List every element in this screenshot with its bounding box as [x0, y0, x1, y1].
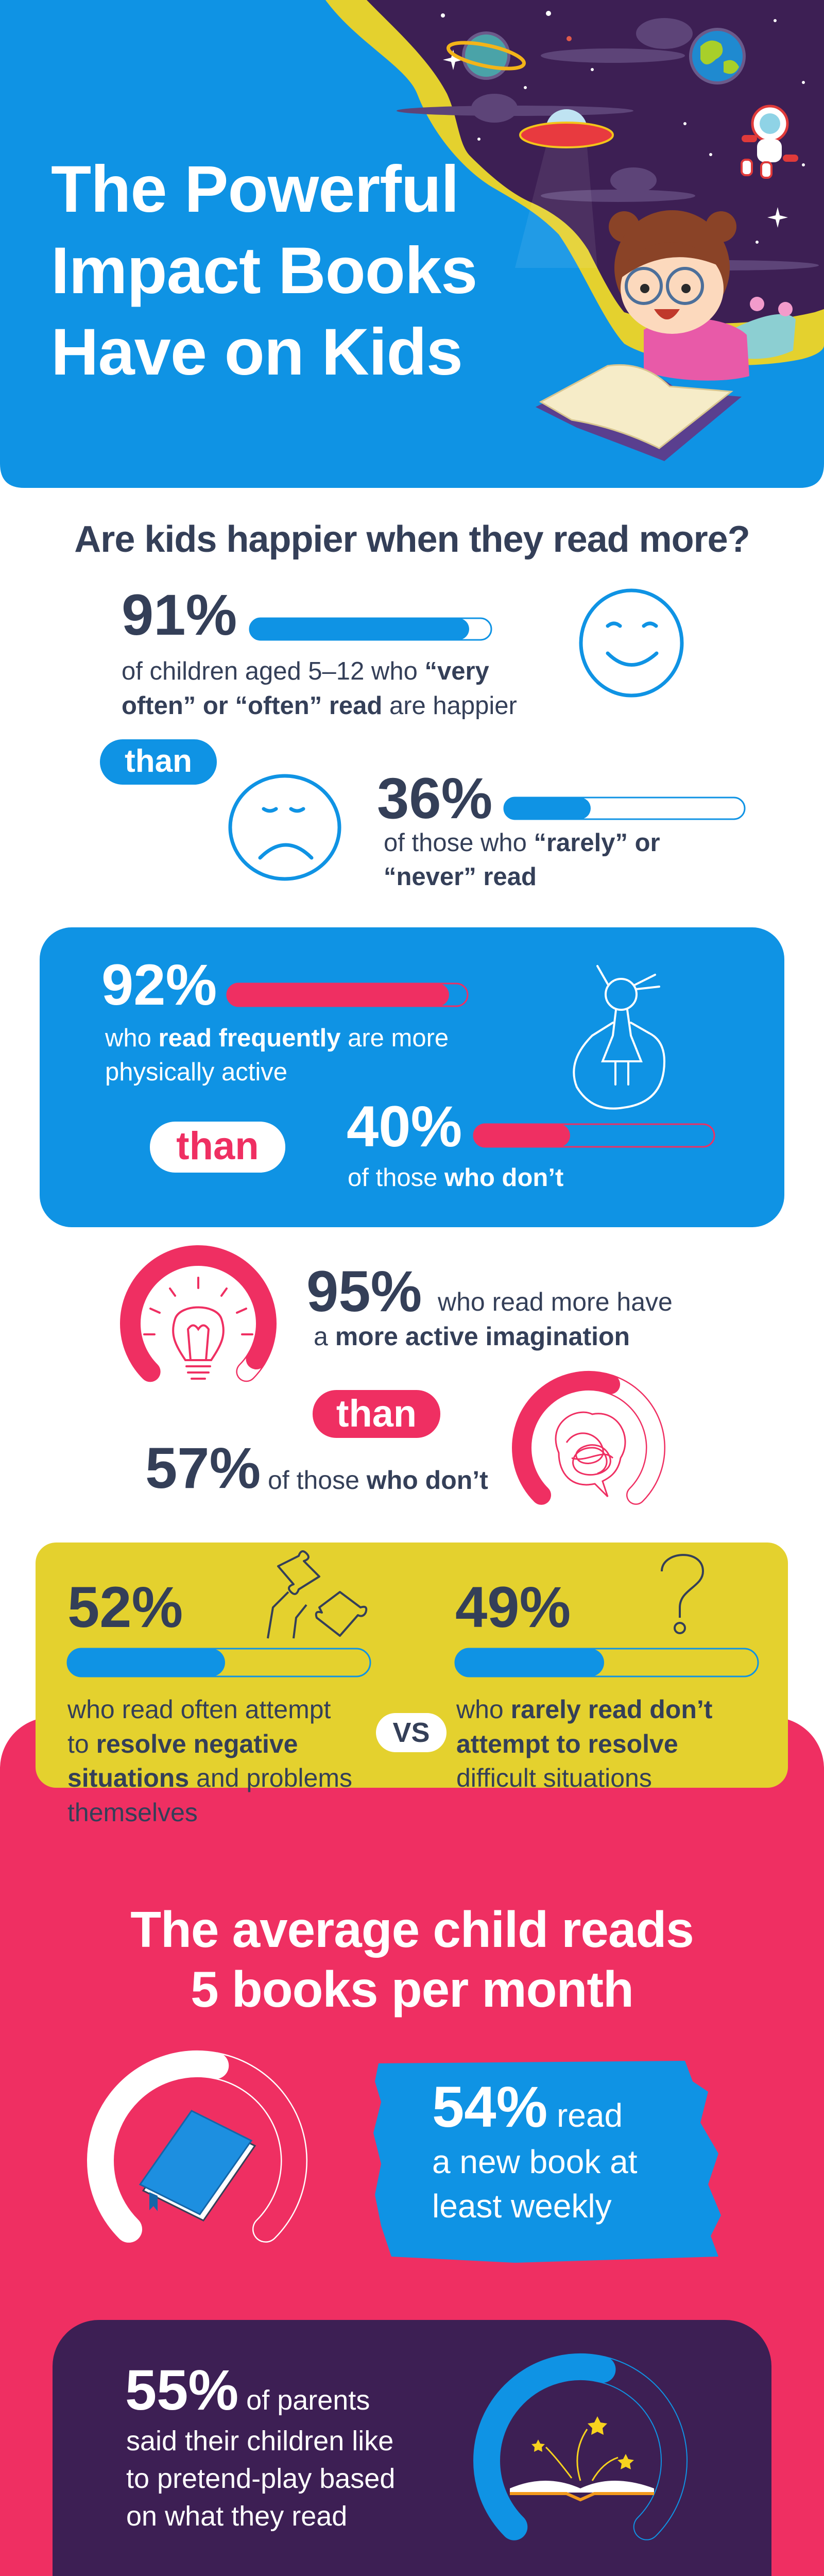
stat 95%: 95% — [306, 1259, 422, 1324]
text 54%: least weekly — [432, 2188, 612, 2225]
icon: closed book — [140, 2111, 255, 2221]
gauge: stars 55% — [448, 2328, 713, 2576]
text 36% — [384, 829, 660, 891]
heading: average child — [130, 1901, 694, 2018]
text 91%: often” or “often” read are happier — [122, 692, 517, 720]
illustration: girl reading — [536, 210, 796, 461]
text 36%: of those who “rarely” or — [384, 829, 660, 857]
icon: ringed planet — [446, 33, 526, 78]
text imagination: a more active imagination — [314, 1322, 630, 1351]
icon: happy face — [581, 590, 682, 696]
gauge: brain 57% — [494, 1353, 683, 1543]
title: The Powerful — [51, 152, 459, 226]
text 36%: “never” read — [384, 863, 537, 891]
pink section background — [0, 1717, 824, 2576]
text 91% — [122, 657, 517, 720]
title — [51, 152, 477, 389]
blue brush panel — [373, 2061, 721, 2263]
panel: physically active — [40, 927, 784, 1227]
space decorations — [397, 11, 819, 270]
title: Have on Kids — [51, 315, 462, 389]
icon: lightbulb — [144, 1278, 252, 1379]
text 52%: who read often attempt — [67, 1695, 331, 1724]
stat 49%: 49% — [455, 1575, 571, 1639]
text 52%: themselves — [67, 1798, 198, 1827]
text 92%: physically active — [105, 1058, 287, 1086]
stat 92%: 92% — [101, 953, 217, 1017]
text 54% — [432, 2143, 638, 2225]
text 55%: said their children like — [126, 2426, 393, 2456]
than pill 2 — [313, 1390, 440, 1438]
icon: sad face — [230, 776, 339, 879]
icon: question mark — [662, 1555, 703, 1633]
heading: average child: The average child reads — [130, 1901, 694, 1958]
than label 2: than — [176, 1124, 259, 1168]
text 55% — [126, 2426, 395, 2532]
text 52%: situations and problems — [67, 1764, 352, 1792]
text 52% — [67, 1695, 352, 1827]
panel: problem solving — [36, 1543, 788, 1788]
icon: ufo — [515, 109, 613, 268]
header background — [0, 0, 824, 488]
text 49%: difficult situations — [456, 1764, 652, 1792]
text 55%: on what they read — [126, 2501, 347, 2532]
stat 55%: 55% of parents — [125, 2359, 370, 2422]
stat 52%: 52% — [67, 1575, 183, 1639]
than pill 1 — [100, 739, 217, 785]
stat 36%: 36% — [377, 766, 492, 831]
text 40%: of those who don’t — [348, 1164, 563, 1192]
stat 91%: 91% — [122, 583, 237, 647]
stat 54%: 54% read — [432, 2075, 623, 2139]
stat 40%: 40% — [347, 1094, 462, 1159]
icon: open book with stars — [510, 2416, 654, 2500]
text 49%: attempt to resolve — [456, 1729, 678, 1758]
icon: puzzle pieces — [268, 1551, 366, 1638]
text 49% — [456, 1695, 712, 1792]
text 57%: of those who don’t — [268, 1466, 488, 1495]
icon: astronaut — [742, 106, 798, 178]
panel: happiness bars — [250, 618, 745, 819]
than label 1: than — [125, 743, 192, 779]
icon: girl jumping rope — [574, 966, 664, 1109]
text 91%: of children aged 5–12 who “very — [122, 657, 489, 685]
heading: are kids happier: Are kids happier when they read more? — [74, 519, 750, 560]
vs label: VS — [392, 1717, 430, 1748]
text 92% — [105, 1024, 449, 1086]
stat 57%: 57% — [145, 1436, 261, 1500]
gauge: book 54% — [60, 2024, 334, 2298]
title: Impact Books — [51, 234, 477, 308]
icon: earth — [691, 29, 744, 83]
text 52%: to resolve negative — [67, 1729, 298, 1758]
text 92%: who read frequently are more — [105, 1024, 449, 1052]
heading: average child: 5 books per month — [191, 1961, 633, 2018]
text 49%: who rarely read don’t — [456, 1695, 712, 1724]
text 54%: a new book at — [432, 2143, 638, 2180]
text 55%: to pretend-play based — [126, 2463, 395, 2494]
text 95%: who read more have — [438, 1287, 673, 1316]
gauge: lightbulb 95% — [102, 1227, 295, 1420]
panel: purple parents — [53, 2320, 771, 2576]
than label 3: than — [336, 1392, 417, 1435]
icon: brain scribble — [556, 1412, 625, 1497]
